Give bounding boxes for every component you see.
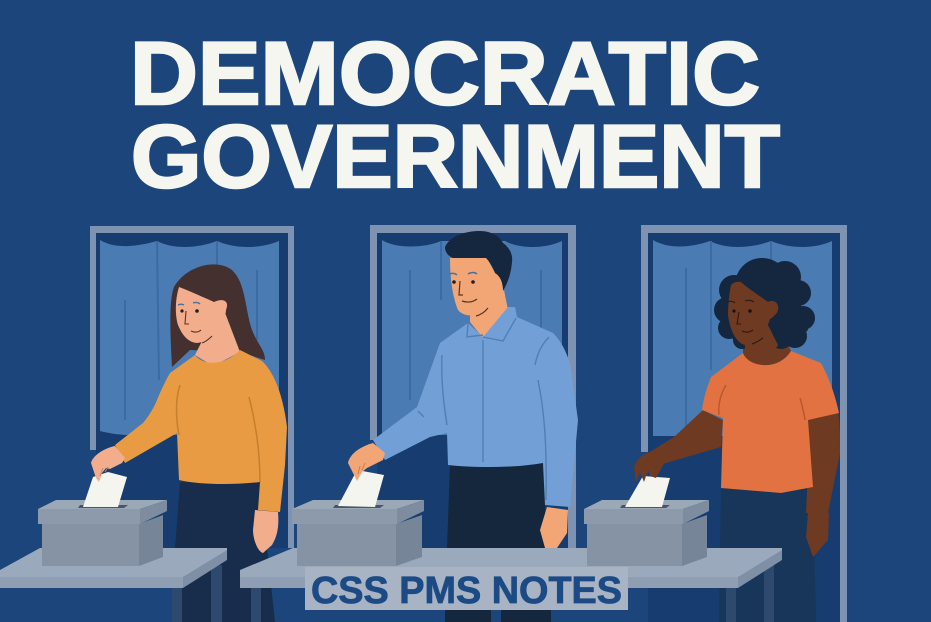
left arm [645,410,723,470]
hand and ballot 2 [338,443,385,507]
booth 1 [90,226,294,548]
hair [445,231,512,291]
hand and ballot 1 [83,446,127,507]
booth 3 [641,225,847,622]
voter 2: man in blue shirt [373,231,578,622]
title: GOVERNMENT [131,106,780,206]
sweater [115,350,287,512]
hand and ballot 3 [625,452,670,507]
ballot box 2 [292,500,424,566]
right arm [806,412,840,513]
voter 3: woman in orange shirt [645,258,840,622]
booth 2 [370,225,576,548]
ballot box 1 [38,500,167,566]
shirt [373,307,578,507]
face [450,258,504,315]
right hand [540,507,568,548]
title [130,23,780,206]
table 2 [240,548,782,622]
face [728,282,778,345]
neck [470,270,508,338]
voter 1: woman in yellow sweater [115,264,287,622]
ballot box 3 [584,500,709,566]
pants [172,482,275,622]
right hand [806,513,829,557]
pants [447,463,545,548]
face [176,287,227,343]
title: DEMOCRATIC [130,23,760,123]
hair [714,258,815,349]
neck [743,318,791,365]
caption label: CSS PMS NOTES [311,570,622,612]
neck [195,310,240,366]
table 1 [0,548,227,622]
neck foreground [745,325,778,361]
right hand [253,510,278,553]
tee [702,351,839,493]
pants [719,488,816,622]
hair [170,264,265,367]
